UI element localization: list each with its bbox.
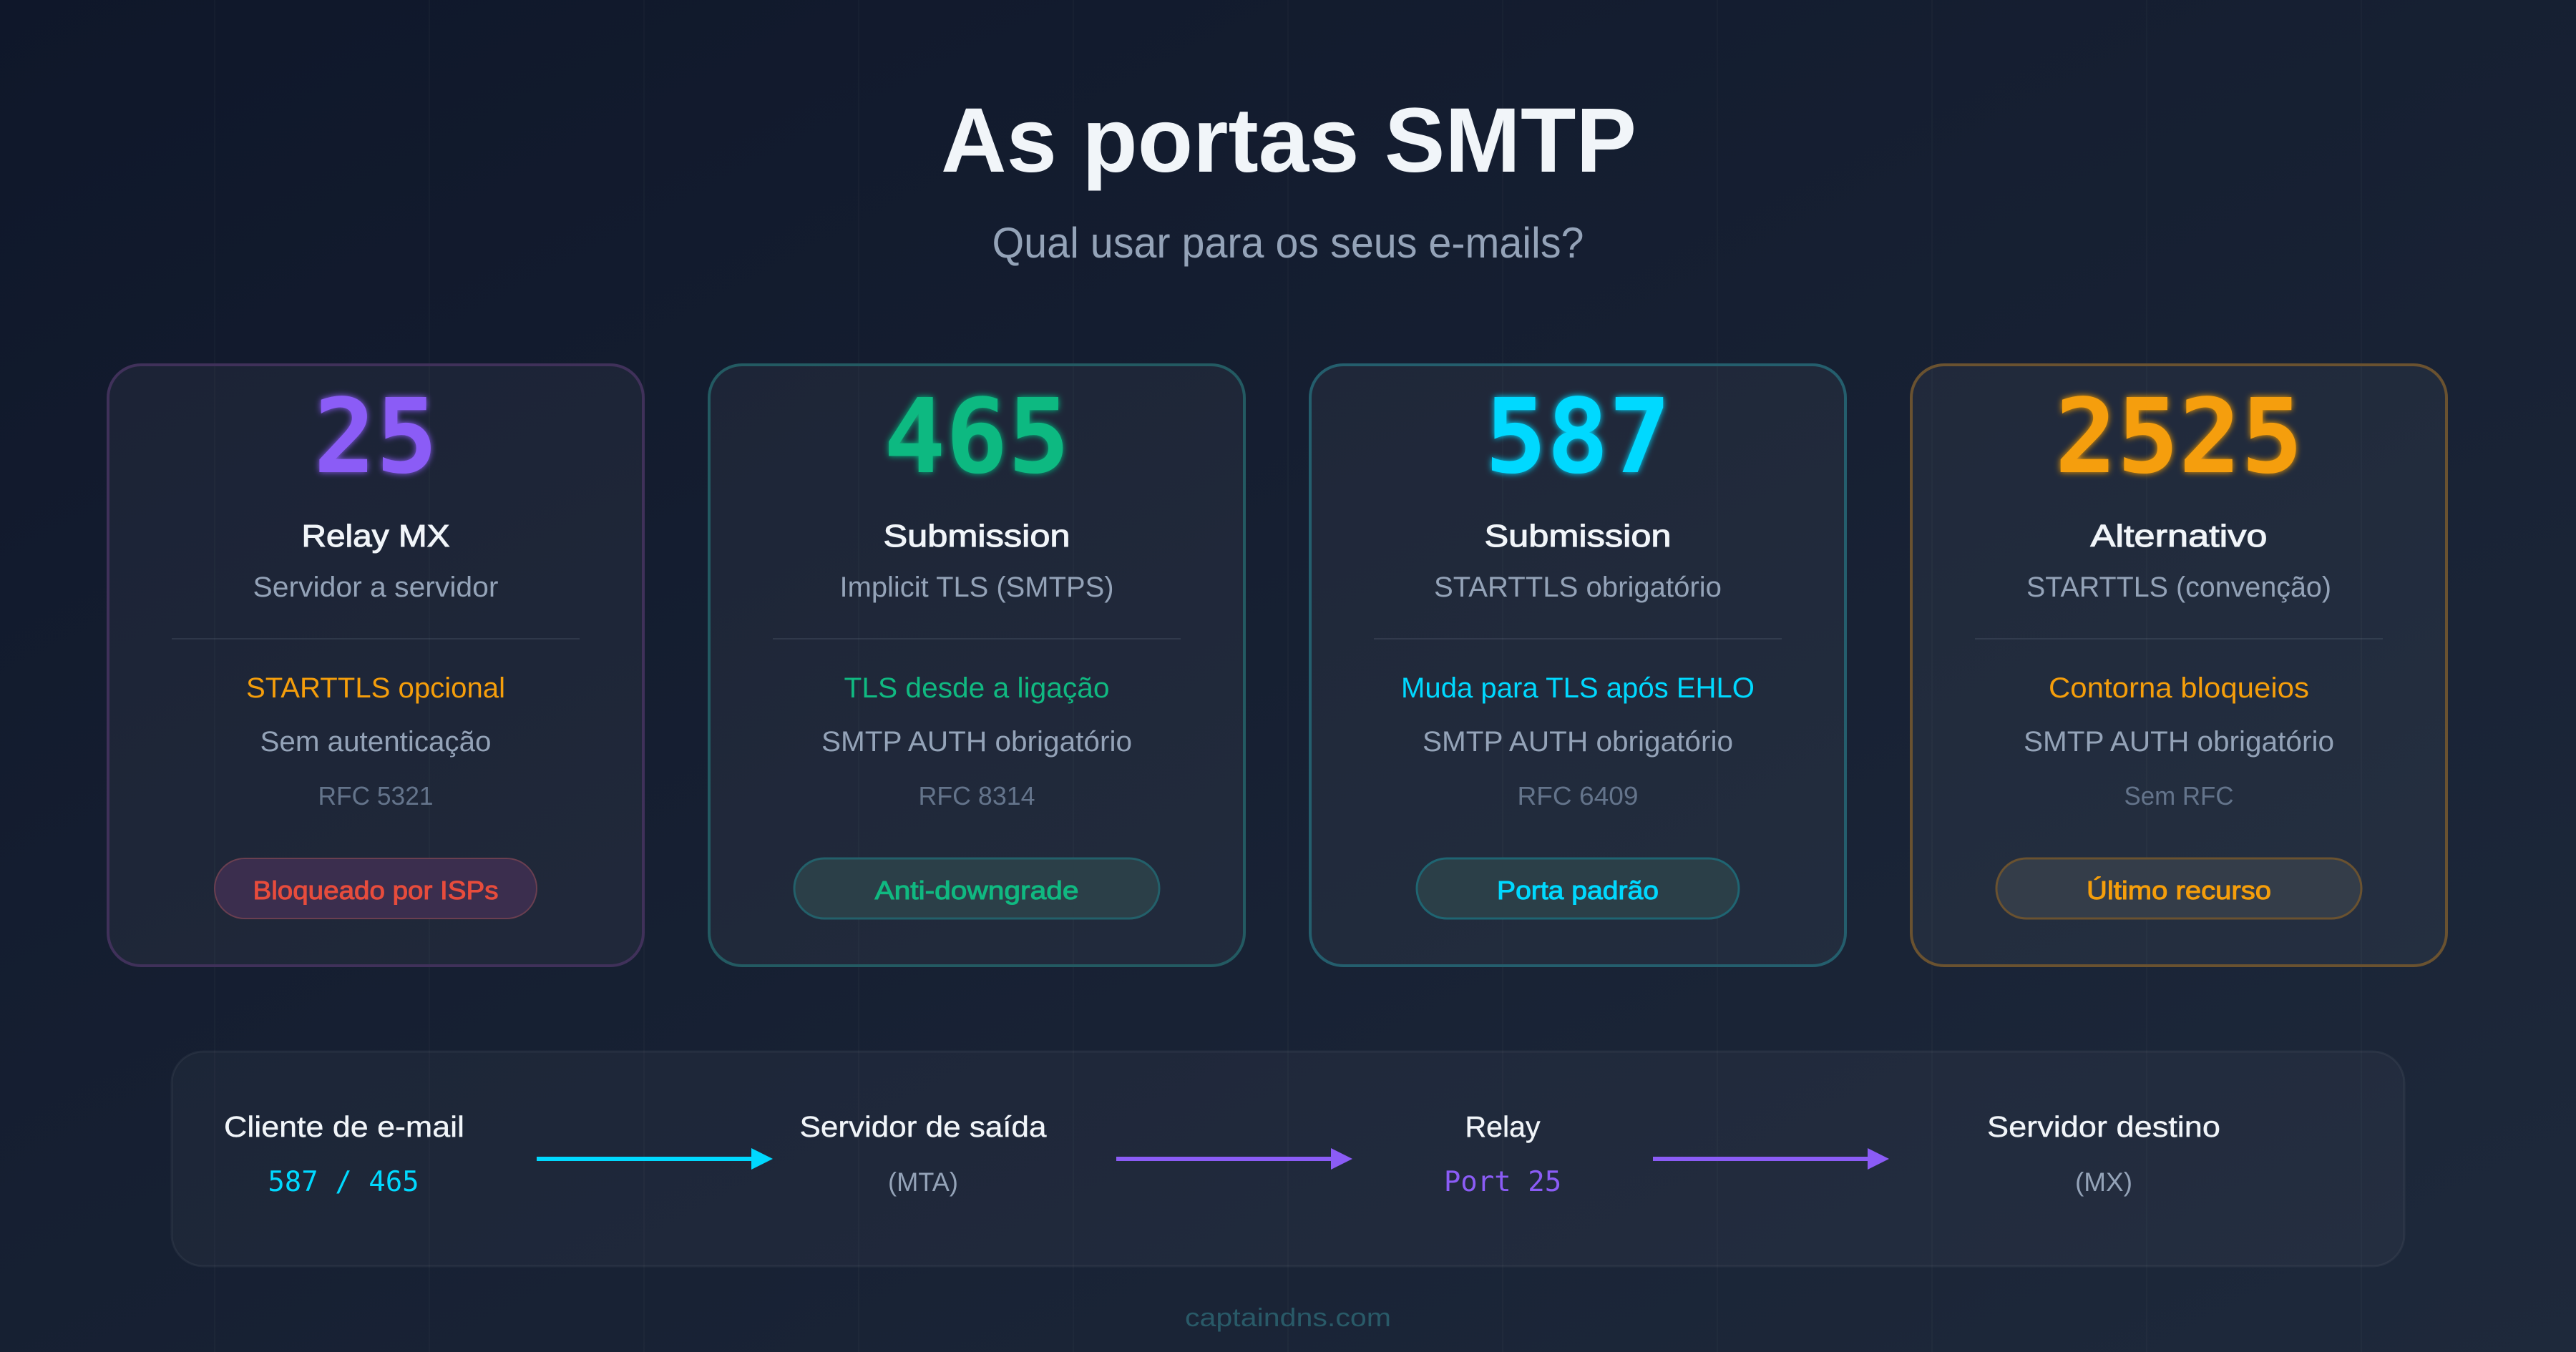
flow step: relay: [1444, 1110, 1561, 1198]
encryption note: TLS desde a ligação: [844, 672, 1109, 704]
badge: blocked: Bloqueado por ISPs: [253, 876, 498, 905]
arrow: relay to destination server: [1653, 1148, 1889, 1170]
RFC reference: RFC 6409: [1517, 781, 1639, 810]
badge: blocked: [215, 858, 537, 919]
port name: Alternativo: [2091, 519, 2267, 554]
encryption note: STARTTLS opcional: [246, 672, 505, 704]
panel: port 25: [108, 365, 643, 966]
panel: mail flow: [172, 1052, 2404, 1266]
badge: default port: [1417, 858, 1739, 919]
flow step: email client: Cliente de e-mail: [224, 1110, 464, 1143]
flow step: destination server: Servidor destino: [1987, 1110, 2220, 1143]
flow step: relay: Relay: [1465, 1110, 1541, 1143]
flow step: destination server: (MX): [2075, 1167, 2132, 1197]
port name: Relay MX: [302, 519, 449, 554]
flow step: outbound server: [800, 1110, 1047, 1197]
auth note: SMTP AUTH obrigatório: [1423, 726, 1733, 758]
RFC reference: RFC 8314: [919, 781, 1035, 810]
panel: port 2525: [1911, 365, 2446, 966]
panel: port 587: [1310, 365, 1845, 966]
port number 587: 587: [1485, 376, 1671, 496]
port name: Submission: [1484, 519, 1672, 554]
title: As portas SMTP: [941, 89, 1636, 192]
port number 2525: 2525: [2055, 376, 2303, 496]
arrow: outbound server to relay: [1116, 1148, 1352, 1170]
port number 25: 25: [313, 376, 438, 496]
auth note: SMTP AUTH obrigatório: [2024, 726, 2334, 758]
port usage: STARTTLS (convenção): [2026, 572, 2331, 603]
panel: port 465: [709, 365, 1244, 966]
flow step: relay: Port 25: [1444, 1166, 1561, 1198]
port name: Submission: [883, 519, 1070, 554]
badge: anti-downgrade: Anti-downgrade: [874, 876, 1079, 905]
badge: default port: Porta padrão: [1497, 876, 1659, 905]
badge: last resort: Último recurso: [2087, 876, 2271, 905]
port usage: Implicit TLS (SMTPS): [840, 572, 1113, 603]
flow step: email client: [224, 1110, 464, 1198]
badge: anti-downgrade: [794, 858, 1159, 919]
badge: last resort: [1996, 858, 2361, 919]
encryption note: Contorna bloqueios: [2049, 672, 2309, 704]
RFC reference: RFC 5321: [318, 781, 434, 810]
flow step: outbound server: (MTA): [888, 1167, 958, 1197]
port usage: STARTTLS obrigatório: [1434, 572, 1722, 603]
RFC reference: Sem RFC: [2124, 781, 2234, 810]
port usage: Servidor a servidor: [253, 572, 498, 603]
encryption note: Muda para TLS após EHLO: [1401, 672, 1755, 704]
flow step: destination server: [1987, 1110, 2220, 1197]
subtitle: Qual usar para os seus e-mails?: [992, 219, 1584, 267]
port number 465: 465: [884, 376, 1070, 496]
arrow: client to outbound server: [537, 1148, 773, 1170]
footer: website: captaindns.com: [1185, 1303, 1391, 1332]
auth note: SMTP AUTH obrigatório: [821, 726, 1132, 758]
flow step: email client: 587 / 465: [268, 1166, 419, 1198]
flow step: outbound server: Servidor de saída: [800, 1110, 1047, 1143]
auth note: Sem autenticação: [260, 726, 491, 758]
